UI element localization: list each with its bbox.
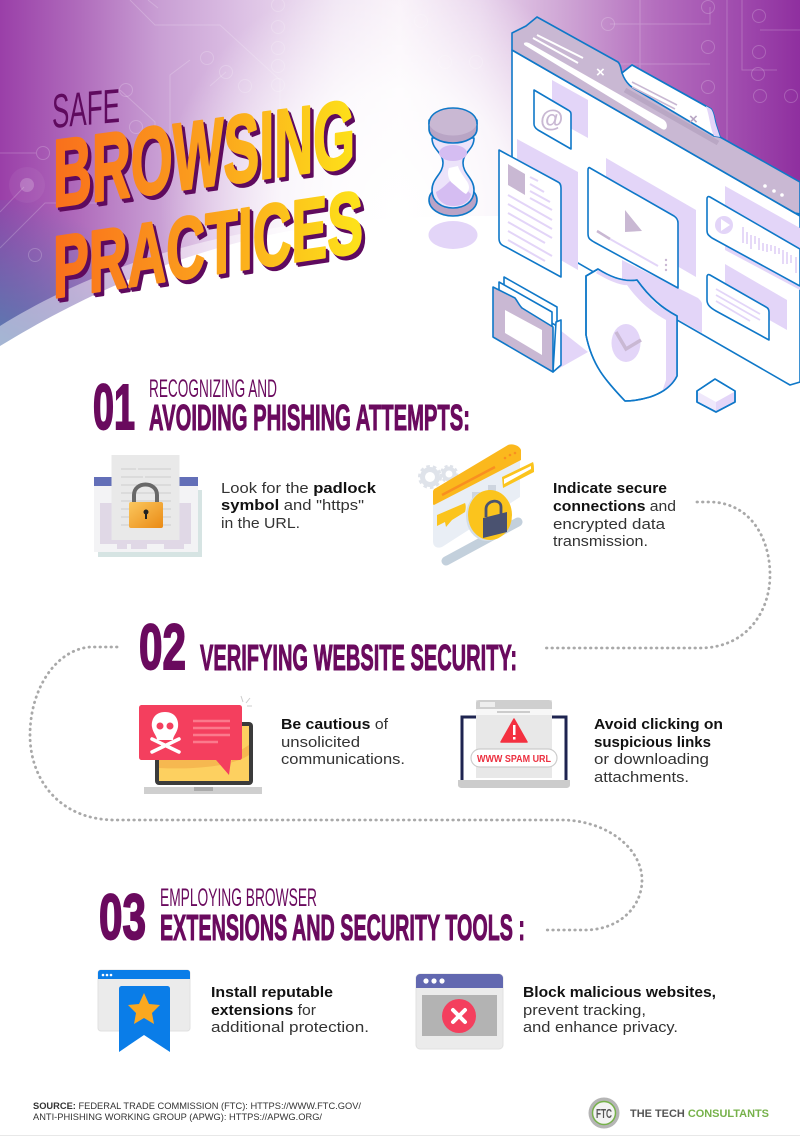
- card: text message: [707, 275, 769, 340]
- icon: spam url laptop: WWW SPAM URL: [477, 754, 551, 765]
- card: at sign: @: [540, 106, 563, 133]
- title: browsing: BROWSING: [53, 81, 355, 228]
- title: practices: PRACTICES: [53, 172, 363, 317]
- title: practices: PRACTICES: [56, 176, 366, 321]
- icon: padlock document: [94, 455, 202, 557]
- section 1: [93, 371, 676, 561]
- section 1: in the URL.: [221, 516, 300, 532]
- section 2: [139, 611, 723, 794]
- section 2: attachments.: [594, 770, 689, 786]
- section 2: or downloading: [594, 752, 709, 768]
- heading: section 1: [149, 375, 470, 438]
- illustration: browser window: ×: [689, 111, 698, 128]
- number 01: 01: [93, 371, 135, 443]
- section 1: transmission.: [553, 534, 648, 550]
- icon: hourglass: [428, 108, 478, 249]
- title: [52, 79, 366, 321]
- dotted connector: section 1 to 2: [544, 502, 770, 648]
- number 03: 03: [99, 881, 146, 953]
- section 2: suspicious links: [594, 735, 711, 751]
- logo: the tech consultants: THE TECH CONSULTANTS: [630, 1108, 769, 1120]
- title: browsing: BROWSING: [56, 85, 358, 232]
- title: browsing: [53, 81, 358, 232]
- number 02: 02: [139, 611, 186, 683]
- icon: spam url laptop: [458, 700, 570, 788]
- title: practices: [53, 172, 366, 321]
- icon: skull alert laptop: [139, 696, 262, 794]
- card: video player: [588, 168, 678, 288]
- section 2: communications.: [281, 752, 405, 768]
- heading: section 3: EMPLOYING BROWSER: [160, 884, 317, 912]
- section 1: encrypted data: [553, 517, 666, 533]
- card: document: [499, 150, 561, 277]
- icon: ribbon star window: [98, 970, 190, 1052]
- title: practices: PRACTICES: [55, 174, 365, 319]
- illustration: cube: [697, 379, 735, 412]
- section 3: extensions for: [211, 1003, 316, 1019]
- text: padlock: Look for the padlock: [221, 481, 377, 497]
- title: safe: SAFE: [52, 79, 120, 139]
- icon: blocked window: [416, 974, 503, 1049]
- logo: the tech consultants: [588, 1098, 769, 1128]
- lilac content blocks: [517, 80, 800, 333]
- section 3: [98, 881, 716, 1052]
- source note: [33, 1101, 361, 1123]
- section 1: symbol and "https": [221, 498, 364, 514]
- text: block malicious: Block malicious websites,: [523, 985, 716, 1001]
- illustration: shield: [586, 269, 677, 401]
- text: cautious: Be cautious of: [281, 717, 389, 733]
- text: secure connections: Indicate secure: [553, 481, 667, 497]
- heading: section 1: RECOGNIZING AND: [149, 375, 277, 403]
- section 3: and enhance privacy.: [523, 1020, 678, 1036]
- heading: section 2: VERIFYING WEBSITE SECURITY:: [200, 637, 517, 678]
- section 1: connections and: [553, 499, 676, 515]
- dotted connector: section 2 to 3: [30, 647, 642, 930]
- header background: [0, 0, 800, 360]
- footer rule: [0, 1135, 800, 1136]
- illustration: folder: [493, 277, 588, 372]
- text: suspicious links: Avoid clicking on: [594, 717, 723, 733]
- section 3: prevent tracking,: [523, 1003, 646, 1019]
- section 2: unsolicited: [281, 735, 360, 751]
- title: browsing: BROWSING: [55, 83, 357, 230]
- card: audio player: [707, 197, 800, 286]
- text: extensions: Install reputable: [211, 985, 333, 1001]
- browser top bar and tabs: [512, 17, 800, 214]
- section 3: additional protection.: [211, 1020, 369, 1036]
- illustration: browser window: ×: [596, 64, 605, 81]
- source note: ANTI-PHISHING WORKING GROUP (APWG): HTTPS://APWG.ORG/: [33, 1112, 322, 1123]
- icon: isometric secure window: [420, 444, 534, 561]
- card: at sign: [534, 90, 571, 149]
- logo: the tech consultants: FTC: [596, 1106, 612, 1121]
- heading: section 3: [160, 884, 525, 948]
- source note: SOURCE: FEDERAL TRADE COMMISSION (FTC): HTTPS://WWW.FTC.GOV/: [33, 1101, 361, 1112]
- heading: section 1: AVOIDING PHISHING ATTEMPTS:: [149, 397, 470, 438]
- illustration: browser window: [499, 17, 800, 385]
